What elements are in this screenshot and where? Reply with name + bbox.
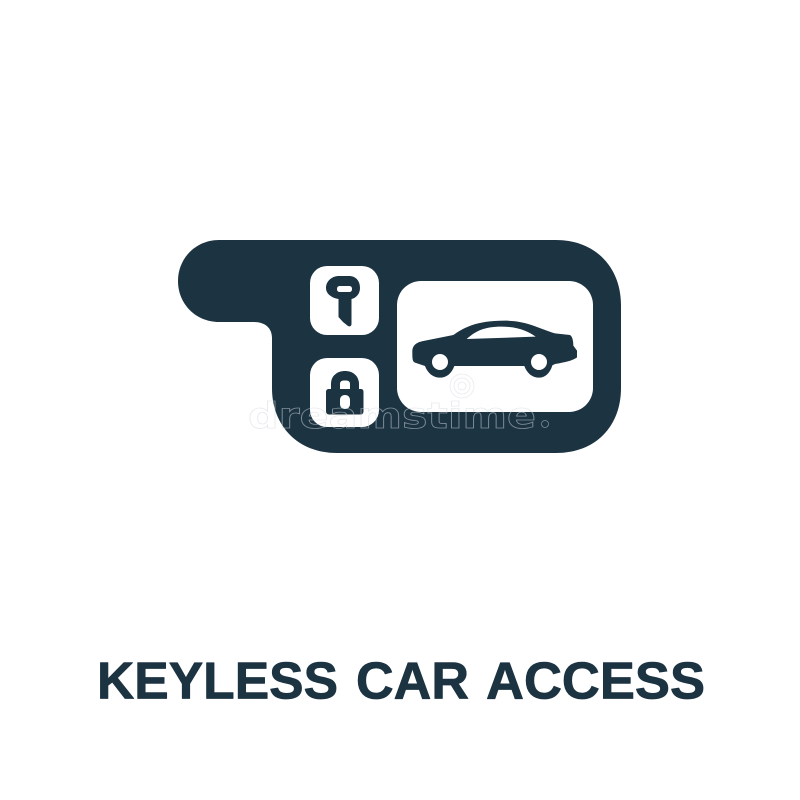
car screen bbox=[397, 281, 593, 412]
watermark: dreamstime bbox=[248, 396, 536, 437]
icon: key bbox=[326, 276, 360, 326]
title: CAR bbox=[356, 652, 469, 710]
fob body bbox=[178, 240, 621, 453]
key button bbox=[310, 266, 379, 335]
icon: car bbox=[412, 321, 577, 378]
icon: padlock bbox=[326, 371, 364, 414]
lock button bbox=[310, 358, 379, 427]
watermark bbox=[248, 374, 548, 437]
icon: car key fob bbox=[178, 240, 621, 453]
title: KEYLESS bbox=[97, 652, 338, 710]
title: ACCESS bbox=[486, 652, 705, 710]
